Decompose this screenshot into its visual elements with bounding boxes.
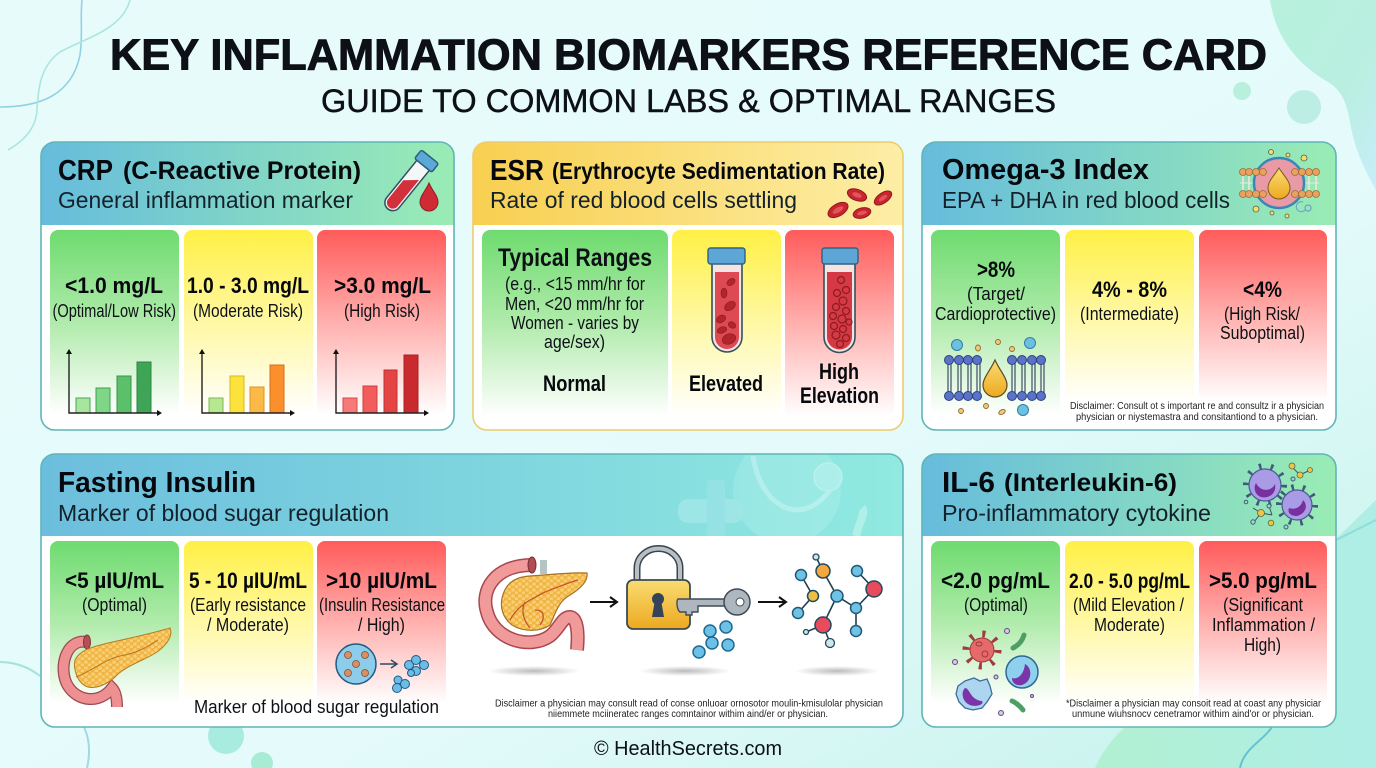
Insulin disclaimer: niiemmete mciineratec ranges comntainor withim aind/er or physician. [548,709,828,720]
CRP range: high: (High Risk) [344,301,420,321]
Omega-3 range: high risk [1199,230,1327,402]
CRP range: moderate: 1.0 - 3.0 mg/L [187,273,309,298]
Omega-3 range: target: >8% [977,257,1015,282]
IL-6 heading [942,467,1177,499]
ESR range: high elevation: Elevation [800,383,879,408]
IL-6 disclaimer [1066,698,1322,720]
ESR range: elevated: Elevated [689,371,763,396]
Omega-3 range: intermediate: (Intermediate) [1080,304,1179,324]
icon: red blood cells [825,186,894,221]
ESR range: normal: Normal [543,371,606,396]
IL-6 range: optimal: <2.0 pg/mL [941,568,1050,593]
IL-6 range: moderate [1065,541,1194,704]
Omega-3 range: intermediate [1065,230,1194,402]
panel: IL-6 [922,454,1336,727]
Omega-3 range: target: Cardioprotective) [935,304,1056,324]
ESR heading: (Erythrocyte Sedimentation Rate) [552,158,885,184]
icon: lock and key [627,549,750,676]
header decoration: translucent cross and bubble [678,455,868,536]
IL-6 range: high: Inflammation / [1212,615,1315,635]
ESR range: normal [482,230,668,417]
footer: © HealthSecrets.com [594,738,782,760]
Omega-3 range: high risk: <4% [1243,277,1282,302]
IL-6 range: high [1199,541,1327,704]
icon: immune cells and cytokines [1244,463,1315,529]
Insulin range: optimal: (Optimal) [82,595,147,615]
CRP heading [58,155,361,187]
Fasting Insulin subheading: Marker of blood sugar regulation [58,500,389,526]
Insulin disclaimer [495,698,883,720]
subtitle: GUIDE TO COMMON LABS & OPTIMAL RANGES [321,83,1056,119]
Omega-3 heading: Omega-3 Index [942,154,1149,186]
icon: pancreas large [485,557,587,676]
Omega-3 range: high risk: (High Risk/ [1224,304,1300,324]
CRP subheading: General inflammation marker [58,187,353,213]
Insulin range: high: >10 µIU/mL [326,568,437,593]
CRP range: moderate: (Moderate Risk) [193,301,303,321]
bar chart: moderate [199,349,295,416]
IL-6 range: high: >5.0 pg/mL [1209,568,1317,593]
icon: test tube elevated [708,248,745,352]
Omega-3 disclaimer: physician or niystemastra and consitantiond to a physician. [1076,412,1318,423]
ESR range: high elevation [785,230,894,417]
Insulin range: high: / High) [358,615,405,635]
IL-6 disclaimer: *Disclaimer a physician may consoit read at coast any physiciar [1066,698,1322,710]
Fasting Insulin heading: Fasting Insulin [58,467,256,499]
ESR subheading: Rate of red blood cells settling [490,187,797,213]
icon: pancreas small [64,628,171,707]
icon: molecule network [792,554,882,676]
icon: virus and immune cells [952,628,1038,716]
Omega-3 disclaimer: Disclaimer: Consult ot s important re and consultz ir a physician [1070,401,1324,412]
arrow: key to molecules [758,597,786,607]
Omega-3 range: target: (Target/ [967,284,1025,304]
IL-6 range: optimal [931,541,1060,716]
ESR range: elevated [672,230,781,417]
Insulin disclaimer: Disclaimer a physician may consult read of conse onluoar ornosotor moulin-kmisulolar physician [495,698,883,710]
IL-6 heading: IL-6 [942,467,995,499]
Omega-3 subheading: EPA + DHA in red blood cells [942,187,1230,213]
CRP range: high: >3.0 mg/L [334,273,431,298]
IL-6 subheading: Pro-inflammatory cytokine [942,500,1211,526]
icon: cell membrane with oil drop [1240,150,1320,218]
Omega-3 range: target [931,230,1060,416]
Insulin caption: Marker of blood sugar regulation [194,697,439,717]
icon: lipid bilayer with oil drop [944,338,1046,416]
CRP heading: (C-Reactive Protein) [123,157,361,185]
arrow: pancreas to lock [590,597,617,607]
Omega-3 range: high risk: Suboptimal) [1220,323,1305,343]
ESR range: normal: age/sex) [544,332,605,352]
ESR range: normal: (e.g., <15 mm/hr for [505,274,645,294]
IL-6 range: moderate: 2.0 - 5.0 pg/mL [1069,570,1190,593]
IL-6 range: moderate: (Mild Elevation / [1073,595,1184,615]
Insulin range: moderate: / Moderate) [207,615,289,635]
Omega-3 disclaimer [1070,401,1324,423]
Omega-3 range: intermediate: 4% - 8% [1092,277,1167,302]
ESR heading: ESR [490,155,544,187]
Insulin range: high [317,541,446,704]
Insulin range: moderate: 5 - 10 µIU/mL [189,568,307,593]
ESR range: normal: Women - varies by [511,313,639,333]
CRP heading: CRP [58,155,113,187]
Insulin range: moderate [184,541,313,704]
bar chart: optimal [66,349,162,416]
CRP range: high [317,230,446,416]
IL-6 range: high: (Significant [1223,595,1303,615]
panel: ESR [473,142,903,430]
CRP range: optimal: <1.0 mg/L [65,273,163,298]
IL-6 range: high: High) [1244,635,1281,655]
ESR range: normal: Typical Ranges [498,244,652,272]
panel: CRP [41,142,454,430]
CRP range: optimal: (Optimal/Low Risk) [52,301,176,321]
IL-6 disclaimer: unmune wiuhsnocv cenetramor withim aind'or or physician. [1072,709,1314,720]
Insulin range: optimal: <5 µIU/mL [65,568,164,593]
icon: insulin cell to clusters [336,644,428,692]
bar chart: high [333,349,429,416]
icon: test tube high [822,248,858,352]
title: KEY INFLAMMATION BIOMARKERS REFERENCE CARD [110,30,1267,80]
Insulin range: moderate: (Early resistance [190,595,306,615]
icon: test tube and blood drop [379,150,439,216]
ESR range: high elevation: High [819,359,859,384]
ESR range: normal: Men, <20 mm/hr for [505,294,644,314]
panel: Omega-3 Index [922,142,1336,430]
IL-6 range: moderate: Moderate) [1094,615,1165,635]
Insulin range: optimal [50,541,179,707]
ESR heading [490,155,885,187]
IL-6 heading: (Interleukin-6) [1004,469,1177,497]
Insulin range: high: (Insulin Resistance [319,595,445,615]
CRP range: moderate [184,230,313,416]
CRP range: optimal [50,230,179,416]
panel: Fasting Insulin [41,436,903,727]
IL-6 range: optimal: (Optimal) [964,595,1028,615]
